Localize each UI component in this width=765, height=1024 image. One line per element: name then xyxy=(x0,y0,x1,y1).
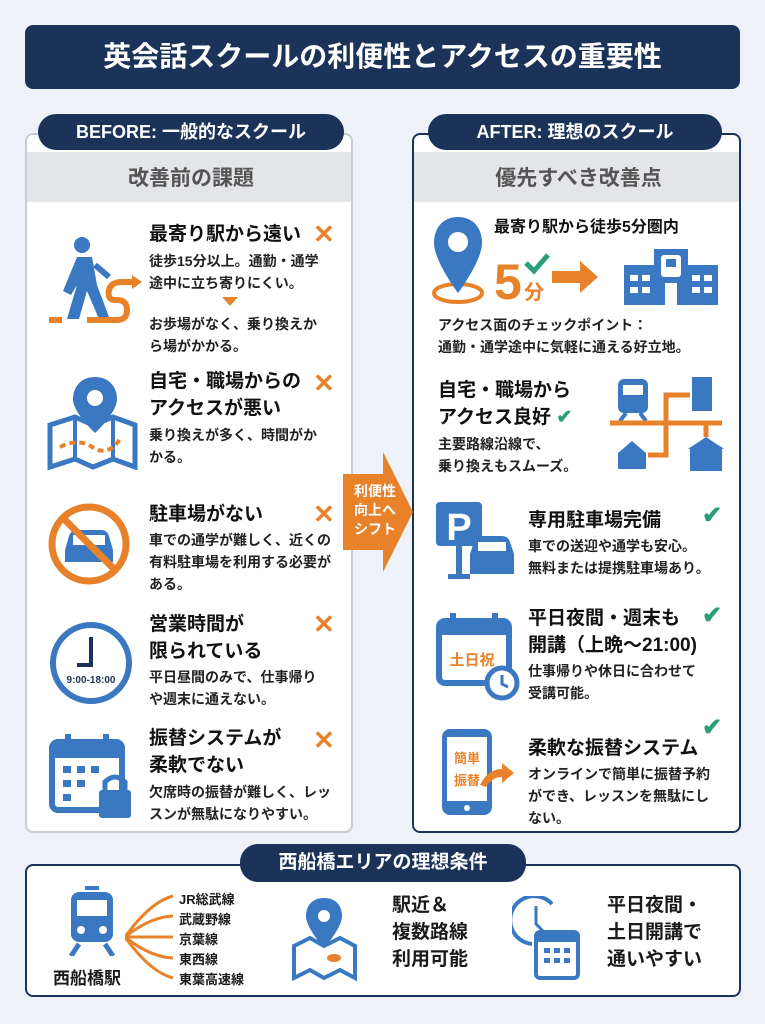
icon: calendar lock xyxy=(49,734,131,818)
station block: 京葉線 xyxy=(179,932,218,947)
area label: 西船橋エリアの理想条件 xyxy=(278,852,488,873)
area label xyxy=(240,844,526,882)
icon: phone: 振替 xyxy=(454,770,480,789)
after label: AFTER: 理想のスクール xyxy=(476,122,674,142)
item: parking xyxy=(436,502,722,579)
before header xyxy=(27,152,355,202)
item: hours xyxy=(50,609,335,707)
arrows xyxy=(125,894,174,980)
panel: nishifunabashi xyxy=(25,864,741,997)
item: reschedule: オンラインで簡単に振替予約ができ、レッスンを無駄にしない。 xyxy=(528,766,710,826)
station block: 西船橋駅 xyxy=(53,969,121,988)
item: parking: 専用駐車場完備 xyxy=(528,510,661,531)
item: reschedule: ✕ xyxy=(313,725,335,755)
icon: calendar clock: 土日祝 xyxy=(449,649,495,670)
item: access: 自宅・職場からの xyxy=(149,371,301,392)
item: 5 min: アクセス面のチェックポイント： xyxy=(438,317,647,333)
icon: phone xyxy=(442,729,514,815)
icon: map pin xyxy=(48,377,138,470)
icon: no parking car xyxy=(48,504,130,584)
panel: before xyxy=(25,133,353,833)
station block: 武蔵野線 xyxy=(179,912,231,927)
item: hours: 受講可能。 xyxy=(528,685,598,701)
station near block: 利用可能 xyxy=(392,949,468,970)
item: 5 min: 通勤・通学途中に気軽に通える好立地。 xyxy=(438,339,690,355)
after label xyxy=(428,114,722,150)
icon: train xyxy=(69,886,115,956)
item: reschedule: ✔ xyxy=(702,714,722,741)
icon: calendar clock xyxy=(436,613,520,700)
title: 英会話スクールの利便性とアクセスの重要性 xyxy=(103,41,662,72)
station block xyxy=(53,886,244,988)
after header: 優先すべき改善点 xyxy=(495,167,662,190)
item: hours: ✔ xyxy=(702,602,722,629)
item: parking: 無料または提携駐車場あり。 xyxy=(528,560,710,576)
icon: map pin xyxy=(292,898,357,981)
icon: network xyxy=(610,377,724,471)
station block: 東葉高速線 xyxy=(179,972,244,987)
schedule block xyxy=(512,894,702,980)
item: hours: 開講（上晩〜21:00) xyxy=(528,635,697,656)
item: 5 min: 最寄り駅から徒歩5分圏内 xyxy=(494,219,679,236)
item: reschedule: 柔軟でない xyxy=(149,755,244,776)
item: hours: 仕事帰りや休日に合わせて xyxy=(528,663,696,679)
item: far station xyxy=(49,219,335,354)
icon: clock calendar xyxy=(512,896,580,980)
item: hours: 限られている xyxy=(149,641,262,662)
schedule block: 土日開講で xyxy=(607,922,702,943)
item: parking: 車での送迎や通学も安心。 xyxy=(528,538,696,554)
schedule block: 平日夜間・ xyxy=(607,895,702,916)
icon: clock xyxy=(50,622,132,704)
station block: JR総武線 xyxy=(179,892,235,907)
before label: BEFORE: 一般的なスクール xyxy=(76,122,306,142)
item: far station: お歩場がなく、乗り換えから場がかかる。 xyxy=(149,316,317,354)
item: reschedule xyxy=(49,725,335,822)
icon: walker xyxy=(49,237,142,323)
item: 5 min xyxy=(432,217,718,355)
item: hours: 営業時間が xyxy=(149,614,244,635)
item: hours: 平日昼間のみで、仕事帰りや週末に通えない。 xyxy=(149,669,316,707)
icon: P car: P xyxy=(446,507,472,549)
icon: P car xyxy=(436,502,514,579)
after header xyxy=(414,152,743,202)
item: reschedule: 欠席時の振替が難しく、レッスンが無駄になりやすい。 xyxy=(149,784,331,822)
item: parking: 駐車場がない xyxy=(149,504,263,525)
item: access good: 自宅・職場から xyxy=(438,380,571,401)
item: hours: 平日夜間・週末も xyxy=(528,608,680,629)
item: parking: 車での通学が難しく、近くの有料駐車場を利用する必要がある。 xyxy=(149,532,331,592)
item: far station: 徒歩15分以上。通勤・通学途中に立ち寄りにくい。 xyxy=(149,253,319,291)
arrow: shift xyxy=(343,452,413,572)
title xyxy=(25,25,740,89)
item: reschedule xyxy=(442,714,722,826)
item: access: ✕ xyxy=(313,368,335,398)
icon: clock: 9:00-18:00 xyxy=(67,675,116,686)
item: parking xyxy=(48,499,335,592)
schedule block: 通いやすい xyxy=(607,949,702,970)
item: access good xyxy=(438,377,724,474)
station near block: 複数路線 xyxy=(392,922,468,943)
before label xyxy=(38,114,344,150)
item: access good: アクセス良好 ✔ xyxy=(438,407,572,428)
item: access xyxy=(48,368,335,470)
arrow: shift: シフト xyxy=(354,521,396,537)
panel: after xyxy=(412,133,741,833)
item: reschedule: 振替システムが xyxy=(149,728,281,749)
item: far station: ✕ xyxy=(313,219,335,249)
item: reschedule: 柔軟な振替システム xyxy=(528,738,698,759)
before header: 改善前の課題 xyxy=(128,167,254,190)
item: far station: 最寄り駅から遠い xyxy=(149,224,301,245)
item: access good: 主要路線沿線で、 xyxy=(438,436,549,452)
station near block: 駅近＆ xyxy=(392,895,449,916)
item: access: 乗り換えが多く、時間がかかる。 xyxy=(149,427,317,465)
arrow: shift: 向上へ xyxy=(354,502,396,518)
item: hours: ✕ xyxy=(313,609,335,639)
item: parking: ✔ xyxy=(702,502,722,529)
icon: pin 5min station: 分 xyxy=(524,276,544,305)
arrow: shift: 利便性 xyxy=(354,483,396,499)
icon: phone: 簡単 xyxy=(454,748,480,767)
item: hours xyxy=(436,602,722,701)
icon: pin 5min station xyxy=(432,217,718,307)
item: access: アクセスが悪い xyxy=(149,398,281,419)
item: access good: 乗り換えもスムーズ。 xyxy=(438,458,577,474)
station near block xyxy=(292,894,468,981)
station block: 東西線 xyxy=(179,952,218,967)
item: parking: ✕ xyxy=(313,499,335,529)
